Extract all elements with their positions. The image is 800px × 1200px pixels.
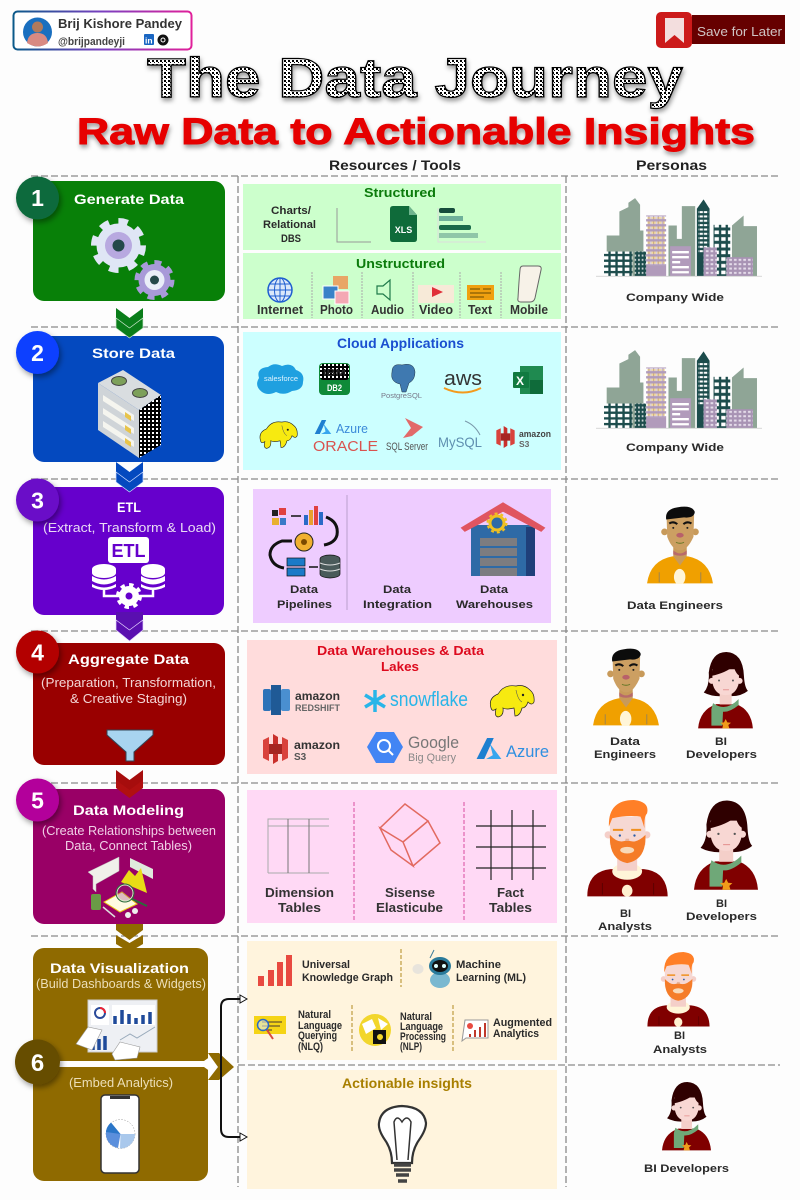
icon: ETL databases: ETL bbox=[112, 541, 146, 561]
author handle: @brijpandeyji bbox=[58, 36, 125, 48]
number badge: 6 bbox=[31, 1050, 44, 1077]
persona: BI developers, modeling bbox=[686, 801, 758, 923]
avatar bbox=[694, 801, 758, 890]
persona label: BI Developers bbox=[644, 1163, 729, 1175]
number badge bbox=[15, 1040, 60, 1084]
persona label: BI bbox=[620, 908, 631, 920]
labels: dimension tables bbox=[265, 886, 334, 915]
label: machine learning: Machine bbox=[456, 959, 501, 971]
labels: dimension tables: Tables bbox=[278, 901, 321, 915]
persona: data engineers, aggregate bbox=[593, 649, 659, 761]
avatar bbox=[662, 1082, 711, 1150]
panel: data modeling tools bbox=[247, 790, 557, 923]
persona label: Data bbox=[610, 736, 641, 748]
heading: Actionable insights bbox=[342, 1076, 472, 1091]
label: machine learning bbox=[456, 959, 526, 984]
number badge: 2 bbox=[31, 340, 44, 366]
persona label bbox=[594, 736, 656, 761]
label: NLQ: (NLQ) bbox=[298, 1041, 323, 1053]
author name: Brij Kishore Pandey bbox=[58, 16, 183, 31]
labels: integration: Data bbox=[383, 584, 412, 596]
subtitle: Raw Data to Actionable Insights bbox=[77, 111, 755, 152]
persona label: BI bbox=[715, 736, 727, 748]
labels: fact tables bbox=[489, 886, 532, 915]
logo: PostgreSQL bbox=[381, 364, 422, 400]
heading: Aggregate Data bbox=[68, 651, 189, 667]
logo: aws: aws bbox=[444, 368, 482, 390]
heading bbox=[317, 643, 485, 674]
labels: integration: Integration bbox=[363, 599, 432, 611]
subheading: embed analytics: (Embed Analytics) bbox=[69, 1076, 173, 1090]
number badge bbox=[16, 478, 59, 522]
icon: XLS file bbox=[390, 206, 417, 242]
label: NLP: Natural bbox=[400, 1011, 432, 1023]
icon: ETL databases bbox=[92, 537, 165, 607]
labels: Mobile bbox=[510, 303, 548, 317]
labels: sisense elasticube: Elasticube bbox=[376, 901, 443, 915]
logo: amazon s3 bbox=[263, 734, 340, 764]
subheading: (Preparation, Transformation, bbox=[41, 676, 216, 690]
logo: oracle: ORACLE bbox=[313, 438, 378, 455]
logo: azure bbox=[315, 420, 368, 436]
labels: sisense elasticube bbox=[376, 886, 443, 915]
number badge bbox=[16, 630, 59, 674]
icon: photos bbox=[323, 276, 349, 304]
subheading: (Build Dashboards & Widgets) bbox=[36, 977, 206, 991]
logo: hadoop bbox=[260, 422, 297, 448]
labels: pipelines bbox=[277, 584, 332, 611]
persona: company wide, store bbox=[596, 350, 762, 454]
labels: pipelines: Pipelines bbox=[277, 599, 332, 611]
logo: amazon redshift: amazon bbox=[295, 689, 340, 703]
icon: warehouse bbox=[463, 504, 543, 576]
persona label: Company Wide bbox=[626, 442, 724, 454]
label: machine learning: Learning (ML) bbox=[456, 972, 526, 984]
logo: amazon s3: S3 bbox=[294, 752, 307, 763]
subheading line 2: & Creative Staging) bbox=[70, 692, 187, 706]
subheading: (Create Relationships between bbox=[42, 824, 216, 838]
logo: MySQL: MySQL bbox=[438, 434, 482, 450]
icon: data pipelines bbox=[270, 506, 340, 578]
label: charts: Relational bbox=[263, 219, 316, 231]
logo: azure: Azure bbox=[336, 421, 368, 436]
label: NLP: Processing bbox=[400, 1031, 446, 1043]
panel: structured data bbox=[243, 184, 561, 250]
icon: augmented chart bbox=[462, 1020, 488, 1041]
label: augmented analytics bbox=[493, 1017, 552, 1040]
avatar bbox=[593, 649, 659, 727]
persona label: Analysts bbox=[653, 1044, 707, 1056]
divider bar with arrow bbox=[58, 1053, 234, 1080]
logo: IBM DB2: DB2 bbox=[327, 383, 342, 393]
persona label bbox=[686, 736, 757, 761]
title: The Data Journey bbox=[147, 46, 683, 109]
number badge: 1 bbox=[31, 185, 44, 211]
heading: Generate Data bbox=[74, 191, 184, 207]
heading: ETL bbox=[117, 499, 141, 515]
persona: company wide, generate bbox=[596, 198, 762, 304]
persona label: Developers bbox=[686, 911, 757, 923]
persona label: Developers bbox=[686, 749, 757, 761]
save for later badge bbox=[656, 12, 785, 48]
avatar bbox=[647, 507, 713, 585]
labels: Audio bbox=[371, 303, 404, 317]
icon: text document bbox=[467, 285, 494, 300]
labels: Text bbox=[468, 303, 493, 317]
logo: google big query bbox=[367, 732, 459, 764]
label: NLP bbox=[400, 1011, 446, 1053]
label: charts bbox=[263, 205, 316, 245]
logo: amazon redshift bbox=[263, 685, 341, 715]
persona label bbox=[653, 1030, 707, 1056]
heading: Data Warehouses & Data bbox=[317, 643, 485, 658]
step 6: data visualization card bbox=[15, 948, 234, 1181]
icon: bookmark bbox=[665, 18, 684, 43]
logo: SQL Server bbox=[386, 418, 428, 453]
logo: snowflake bbox=[365, 689, 468, 712]
heading: Cloud Applications bbox=[337, 336, 464, 351]
labels: integration bbox=[363, 584, 432, 611]
logo: hadoop bbox=[490, 686, 534, 717]
number badge: 5 bbox=[31, 788, 44, 814]
logo: excel bbox=[513, 366, 543, 394]
label: universal knowledge graph: Universal bbox=[302, 959, 350, 971]
logo: SQL Server: SQL Server bbox=[386, 441, 428, 453]
persona: BI analysts, modeling bbox=[587, 800, 668, 933]
connector bracket with arrows bbox=[221, 995, 247, 1141]
heading: Structured bbox=[364, 185, 436, 200]
labels: fact tables: Fact bbox=[497, 886, 525, 900]
icon: threads bbox=[158, 34, 168, 46]
persona: BI analysts, visualization bbox=[647, 952, 710, 1056]
labels: dimension tables: Dimension bbox=[265, 886, 334, 900]
icon: linkedin: in bbox=[145, 36, 153, 46]
subheading line 2: Data, Connect Tables) bbox=[65, 839, 192, 853]
label: universal knowledge graph bbox=[302, 959, 393, 984]
icon: XLS file: XLS bbox=[395, 225, 412, 235]
icon: phone with pie chart bbox=[101, 1095, 139, 1173]
icon: funnel bbox=[107, 730, 153, 761]
icon: linkedin bbox=[144, 34, 154, 46]
labels: Video bbox=[419, 303, 453, 317]
labels: Internet bbox=[257, 303, 304, 317]
logo: google big query: Google bbox=[408, 733, 459, 752]
label: augmented analytics: Analytics bbox=[493, 1028, 539, 1040]
label: NLQ: Querying bbox=[298, 1030, 337, 1042]
persona: BI developers, insights bbox=[644, 1082, 729, 1175]
step 1: generate data card bbox=[16, 176, 225, 301]
label: charts: DBS bbox=[281, 233, 301, 245]
labels: pipelines: Data bbox=[290, 584, 319, 596]
icon: city skyline bbox=[596, 350, 762, 428]
heading: Data Visualization bbox=[50, 960, 189, 976]
label: NLQ: Language bbox=[298, 1020, 342, 1032]
persona label: Data Engineers bbox=[627, 600, 723, 612]
panel: data visualization tools bbox=[247, 941, 557, 1060]
icon: bar chart bbox=[438, 208, 486, 242]
icon: city skyline bbox=[596, 198, 762, 276]
icon: cube bbox=[380, 804, 440, 866]
persona label: BI bbox=[674, 1030, 685, 1042]
icon: mobile phone bbox=[518, 266, 541, 302]
logo: amazon S3 bbox=[496, 426, 551, 449]
persona label: Analysts bbox=[598, 921, 652, 933]
number badge: 3 bbox=[31, 488, 44, 514]
logo: salesforce: salesforce bbox=[264, 374, 298, 383]
heading: Store Data bbox=[92, 345, 175, 361]
heading: Data Modeling bbox=[73, 802, 184, 818]
column heading: personas: Personas bbox=[636, 158, 707, 173]
persona label: Company Wide bbox=[626, 292, 724, 304]
panel: ETL tools bbox=[253, 489, 551, 623]
avatar bbox=[647, 952, 710, 1027]
heading: Lakes bbox=[381, 659, 419, 674]
logo: IBM DB2: IBM bbox=[323, 368, 346, 379]
label: NLP: Language bbox=[400, 1021, 443, 1033]
logo: IBM DB2 bbox=[319, 363, 350, 395]
labels: warehouses: Data bbox=[480, 584, 509, 596]
icon: dimension table bbox=[268, 819, 329, 873]
avatar bbox=[698, 652, 753, 728]
persona label: BI bbox=[716, 898, 727, 910]
label: NLQ: Natural bbox=[298, 1009, 331, 1021]
logo: PostgreSQL: PostgreSQL bbox=[381, 393, 422, 400]
chevron arrows between cards bbox=[116, 308, 143, 952]
icon: NLQ document with magnifier bbox=[254, 1016, 286, 1039]
step 5: data modeling card bbox=[16, 778, 225, 924]
labels: sisense elasticube: Sisense bbox=[385, 886, 435, 900]
persona: data engineers, ETL bbox=[627, 507, 723, 612]
logo: excel: X bbox=[516, 374, 524, 388]
save label: Save for Later bbox=[697, 24, 783, 39]
icon: video bbox=[418, 285, 454, 303]
icon: robot bbox=[412, 950, 451, 988]
author badge bbox=[14, 12, 192, 50]
column heading: resources and tools: Resources / Tools bbox=[329, 158, 461, 173]
panel: cloud applications bbox=[243, 332, 561, 470]
step 3: ETL card bbox=[16, 478, 224, 615]
icon: fact grid bbox=[476, 810, 546, 880]
persona label bbox=[686, 898, 757, 923]
heading: Unstructured bbox=[356, 256, 445, 271]
icon: red bars bbox=[258, 955, 292, 986]
subheading: (Extract, Transform & Load) bbox=[43, 521, 216, 535]
chart axis bbox=[337, 208, 371, 242]
icon: light bulb bbox=[379, 1106, 426, 1181]
panel: data warehouses and data lakes bbox=[247, 640, 557, 774]
labels: Photo bbox=[320, 303, 353, 317]
icon: gears bbox=[94, 222, 172, 298]
number badge bbox=[16, 331, 59, 374]
panel: actionable insights bbox=[247, 1070, 557, 1189]
logo: amazon S3: S3 bbox=[519, 439, 530, 449]
number badge bbox=[16, 778, 59, 822]
icon: modeling board bbox=[88, 857, 153, 918]
labels: warehouses bbox=[456, 584, 533, 611]
logo: amazon redshift: REDSHIFT bbox=[295, 703, 341, 713]
logo: snowflake: snowflake bbox=[390, 689, 468, 711]
label: charts: Charts/ bbox=[271, 205, 311, 217]
step 2: store data card bbox=[16, 331, 224, 462]
persona label: Engineers bbox=[594, 749, 656, 761]
icon: NLP globe bbox=[359, 1014, 391, 1046]
persona label bbox=[598, 908, 652, 933]
icon: server rack bbox=[98, 370, 161, 458]
panel: unstructured data bbox=[243, 253, 561, 319]
label: universal knowledge graph: Knowledge Graph bbox=[302, 972, 393, 984]
step 4: aggregate data card bbox=[16, 630, 225, 765]
icon: speaker bbox=[377, 280, 390, 300]
logo: azure: Azure bbox=[506, 742, 549, 761]
avatar bbox=[587, 800, 668, 897]
number badge bbox=[16, 176, 59, 220]
grid of dashed dividers bbox=[31, 176, 780, 1187]
icon: globe bbox=[268, 278, 292, 302]
logo: amazon s3: amazon bbox=[294, 738, 340, 752]
logo: amazon S3: amazon bbox=[519, 429, 551, 439]
persona: BI developers, aggregate bbox=[686, 652, 757, 761]
labels bbox=[257, 303, 548, 317]
logo: salesforce bbox=[257, 364, 303, 394]
labels: warehouses: Warehouses bbox=[456, 599, 533, 611]
label: augmented analytics: Augmented bbox=[493, 1017, 552, 1029]
label: NLP: (NLP) bbox=[400, 1041, 422, 1053]
number badge: 4 bbox=[31, 640, 44, 666]
logo: azure bbox=[477, 738, 549, 761]
logo: google big query: Big Query bbox=[408, 752, 456, 764]
icon: avatar bbox=[23, 18, 52, 46]
labels: fact tables: Tables bbox=[489, 901, 532, 915]
label: NLQ bbox=[298, 1009, 342, 1053]
logo: MySQL bbox=[438, 421, 482, 450]
icon: dashboard with hands bbox=[76, 1000, 157, 1060]
